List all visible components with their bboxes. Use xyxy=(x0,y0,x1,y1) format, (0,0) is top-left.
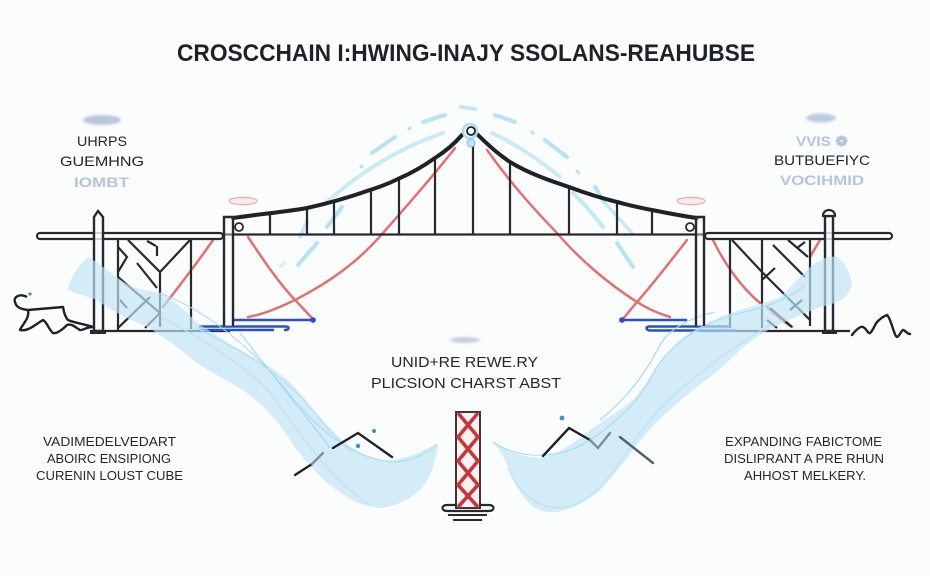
dashed light-blue arc xyxy=(281,107,633,267)
right mountain xyxy=(543,428,653,463)
right water swoosh xyxy=(493,257,852,512)
squiggle right xyxy=(852,315,910,337)
right tower and deck xyxy=(700,210,892,334)
blue lines left xyxy=(200,318,315,330)
left text block: UHRPS xyxy=(77,133,127,149)
main cable xyxy=(233,135,697,218)
small blue marks xyxy=(28,292,564,448)
left pylon xyxy=(224,217,233,326)
blue lines right xyxy=(620,318,735,330)
left pulley xyxy=(235,223,243,231)
title: CROSCCHAIN I:HWING-INAJY SSOLANS-REAHUBSE xyxy=(177,40,755,67)
bottom-right text: EXPANDING FABICTOME xyxy=(725,434,882,449)
left label smudge xyxy=(83,115,121,125)
bottom-left text xyxy=(36,434,183,483)
bottom-right text xyxy=(724,434,884,483)
center heading: UNID+RE REWE.RY xyxy=(391,354,538,371)
left mountain xyxy=(295,433,392,475)
right pylon xyxy=(696,217,704,326)
right pulley xyxy=(686,223,694,231)
left tower and deck xyxy=(37,211,230,334)
hangers xyxy=(270,145,652,234)
bottom-left text: VADIMEDELVEDART xyxy=(43,434,176,449)
center heading xyxy=(371,337,561,392)
tower base xyxy=(442,505,494,511)
smudge above heading xyxy=(450,337,480,343)
bottom-right text: AHHOST MELKERY. xyxy=(744,468,866,483)
central lattice tower xyxy=(442,412,494,520)
right text block: BUTBUEFIYC xyxy=(774,152,870,168)
main bridge span xyxy=(224,124,706,326)
bottom-right text: DISLIPRANT A PRE RHUN xyxy=(724,451,884,466)
left water swoosh xyxy=(68,258,437,508)
deck xyxy=(224,233,706,236)
red tension cables xyxy=(163,148,820,327)
squiggle left xyxy=(15,295,93,333)
right text block: VVIS ❁ xyxy=(796,133,848,149)
left text block: GUEMHNG xyxy=(60,153,144,169)
red pill left xyxy=(229,197,257,205)
bottom-left text: CURENIN LOUST CUBE xyxy=(36,468,183,483)
right label smudge xyxy=(806,114,836,122)
left text block: IOMBT xyxy=(74,174,130,190)
right text block: VOCIHMID xyxy=(780,172,864,188)
apex joint xyxy=(463,124,477,147)
left text block xyxy=(60,115,144,190)
bottom-left text: ABOIRC ENSIPIONG xyxy=(47,451,171,466)
red pill right xyxy=(677,197,705,205)
right text block xyxy=(774,114,870,188)
center heading: PLICSION CHARST ABST xyxy=(371,375,561,392)
